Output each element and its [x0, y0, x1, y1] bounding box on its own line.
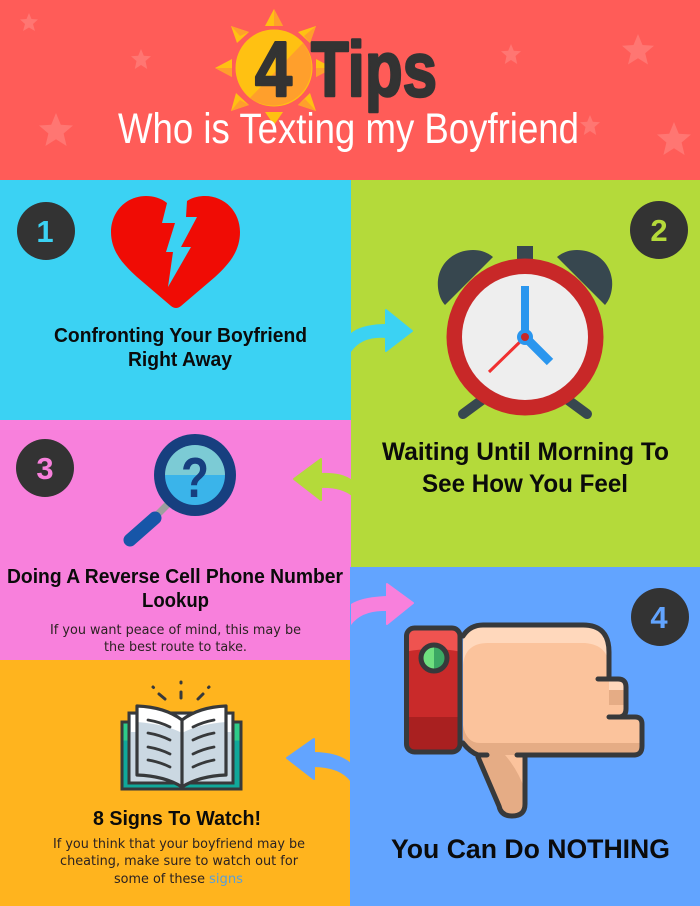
- text: signs description: If you think that your boyfriend may be: [53, 836, 305, 852]
- badge: number 4: 4: [650, 600, 668, 635]
- panel: tip 3 reverse lookup: [0, 420, 351, 660]
- heading: 8 signs: 8 Signs To Watch!: [93, 808, 261, 830]
- text: signs description: [53, 836, 305, 887]
- badge: number 3: 3: [36, 451, 54, 486]
- title: 4 Tips: Tips: [311, 25, 437, 113]
- title: 4 Tips: 4: [255, 25, 292, 113]
- badge: number 3: [16, 439, 74, 497]
- text: tip 3 description: If you want peace of mind, this may be: [50, 622, 301, 638]
- text: tip 3 description: [50, 622, 301, 655]
- icon: alarm clock: [438, 246, 612, 416]
- badge: number 4: [631, 588, 689, 646]
- heading: tip 1: [54, 325, 307, 371]
- heading: tip 2: See How You Feel: [422, 470, 628, 498]
- panel: tip 2 waiting: [351, 180, 700, 567]
- arrow: tip 3 to tip 4: [351, 584, 413, 625]
- heading: tip 2: [382, 438, 669, 498]
- text: signs description: cheating, make sure to watch out for: [60, 853, 298, 869]
- heading: tip 3: Lookup: [142, 590, 209, 612]
- icon: magnifying glass: [130, 434, 236, 540]
- decorative stars: [20, 13, 691, 155]
- text: tip 3 description: the best route to take.: [104, 639, 247, 655]
- icon: broken heart: [111, 196, 240, 308]
- subtitle: Who is Texting my Boyfriend: [118, 105, 579, 153]
- icon: open book: [122, 682, 241, 789]
- text: signs description: some of these: [114, 871, 205, 887]
- heading: tip 3: Doing A Reverse Cell Phone Number: [7, 566, 343, 588]
- icon: sun: [215, 9, 333, 125]
- icon: thumbs down: [404, 620, 650, 816]
- badge: number 1: 1: [36, 214, 54, 249]
- panel: tip 4 do nothing: [350, 567, 700, 906]
- arrow: tip 2 to tip 3: [294, 459, 352, 500]
- heading: tip 1: Confronting Your Boyfriend: [54, 325, 307, 347]
- panel: header banner: [0, 0, 700, 180]
- arrow: tip 4 to signs: [287, 739, 351, 782]
- heading: tip 4: You Can Do NOTHING: [391, 834, 670, 864]
- heading: tip 3: [7, 566, 343, 612]
- badge: number 2: [630, 201, 688, 259]
- badge: number 1: [17, 202, 75, 260]
- panel: tip 1 confronting: [0, 180, 351, 420]
- title: 4 Tips: [255, 25, 437, 113]
- heading: tip 1: Right Away: [128, 349, 233, 371]
- heading: tip 2: Waiting Until Morning To: [382, 438, 669, 466]
- arrow: tip 1 to tip 2: [351, 310, 412, 352]
- badge: number 2: 2: [650, 213, 668, 248]
- icon: magnifying glass: ?: [181, 446, 209, 510]
- text: signs description: signs: [209, 871, 243, 887]
- panel: 8 signs to watch: [0, 660, 350, 906]
